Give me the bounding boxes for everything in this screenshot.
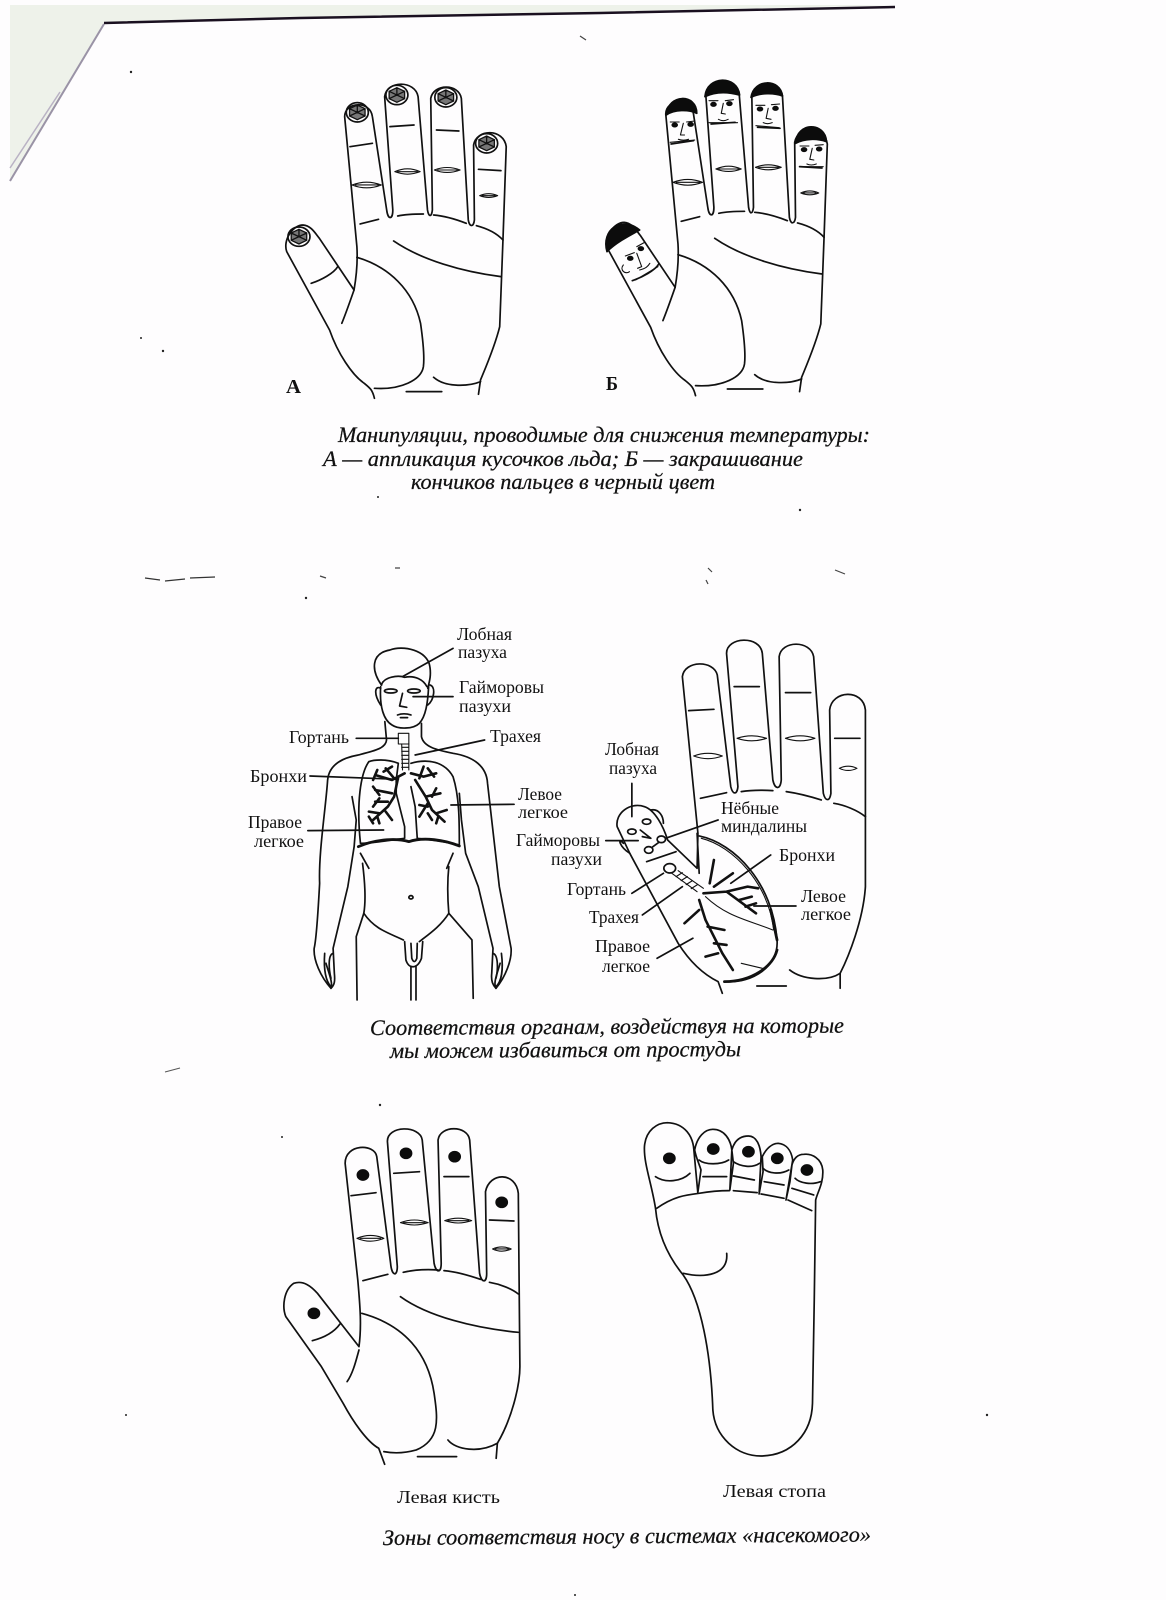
caption: organ correspondences: Соответствия органам, воздействуя на которые <box>370 1013 844 1040</box>
caption: nose zones: Зоны соответствия носу в системах «насекомого» <box>383 1522 871 1550</box>
caption: manipulations <box>321 422 870 494</box>
panel: nose zones in insect system <box>284 1123 871 1550</box>
caption: manipulations: Манипуляции, проводимые для снижения температуры: <box>337 422 870 447</box>
labels: hand organs <box>516 739 851 976</box>
panel: organ correspondences <box>248 624 865 1063</box>
labels: hand organs: легкое <box>801 904 851 924</box>
label A: А <box>286 376 302 398</box>
labels: hand organs: легкое <box>602 956 650 976</box>
caption: manipulations: кончиков пальцев в черный цвет <box>411 469 715 494</box>
caption: manipulations: А — аппликация кусочков льда; Б — закрашивание <box>321 446 803 471</box>
icon: hand B with black fingertips and faces <box>606 80 827 396</box>
labels: hand organs: Гайморовы <box>516 830 600 850</box>
panel: manipulations to reduce temperature <box>286 80 870 494</box>
labels: hand organs: Лобная <box>605 739 659 759</box>
labels: hand organs: пазухи <box>551 849 602 869</box>
labels: torso organs: Гортань <box>289 727 349 747</box>
icon: human torso with lungs <box>308 648 514 1000</box>
labels: hand organs: миндалины <box>721 816 807 836</box>
labels: torso organs: легкое <box>518 802 568 822</box>
caption: organ correspondences <box>370 1013 844 1063</box>
labels: torso organs: Правое <box>248 812 302 832</box>
labels: hand organs: Левое <box>801 886 846 906</box>
labels: hand organs: Правое <box>595 936 650 956</box>
labels: torso organs <box>248 624 568 851</box>
icon: hand A with ice pieces <box>286 84 506 398</box>
labels: torso organs: Левое <box>518 784 562 804</box>
labels: torso organs: Гайморовы <box>459 677 544 697</box>
labels: hand organs: Бронхи <box>779 845 835 865</box>
labels: hand organs: Трахея <box>589 907 639 927</box>
labels: torso organs: Трахея <box>490 726 541 746</box>
label: left hand: Левая кисть <box>397 1487 500 1507</box>
icon: hand with organ projection on thumb <box>606 640 865 993</box>
scanned page corner <box>10 5 900 181</box>
labels: torso organs: Бронхи <box>250 766 307 786</box>
labels: hand organs: Гортань <box>567 879 626 899</box>
labels: torso organs: легкое <box>254 831 304 851</box>
icon: left foot with nose points <box>644 1123 823 1456</box>
labels: torso organs: пазухи <box>459 696 511 716</box>
labels: hand organs: Нёбные <box>721 798 779 818</box>
caption: organ correspondences: мы можем избавиться от простуды <box>389 1036 741 1063</box>
labels: torso organs: Лобная <box>457 624 512 644</box>
labels: hand organs: пазуха <box>609 758 657 778</box>
icon: left hand with nose points <box>284 1129 520 1464</box>
labels: torso organs: пазуха <box>458 642 507 662</box>
label B: Б <box>606 373 618 395</box>
label: left foot: Левая стопа <box>723 1481 826 1501</box>
